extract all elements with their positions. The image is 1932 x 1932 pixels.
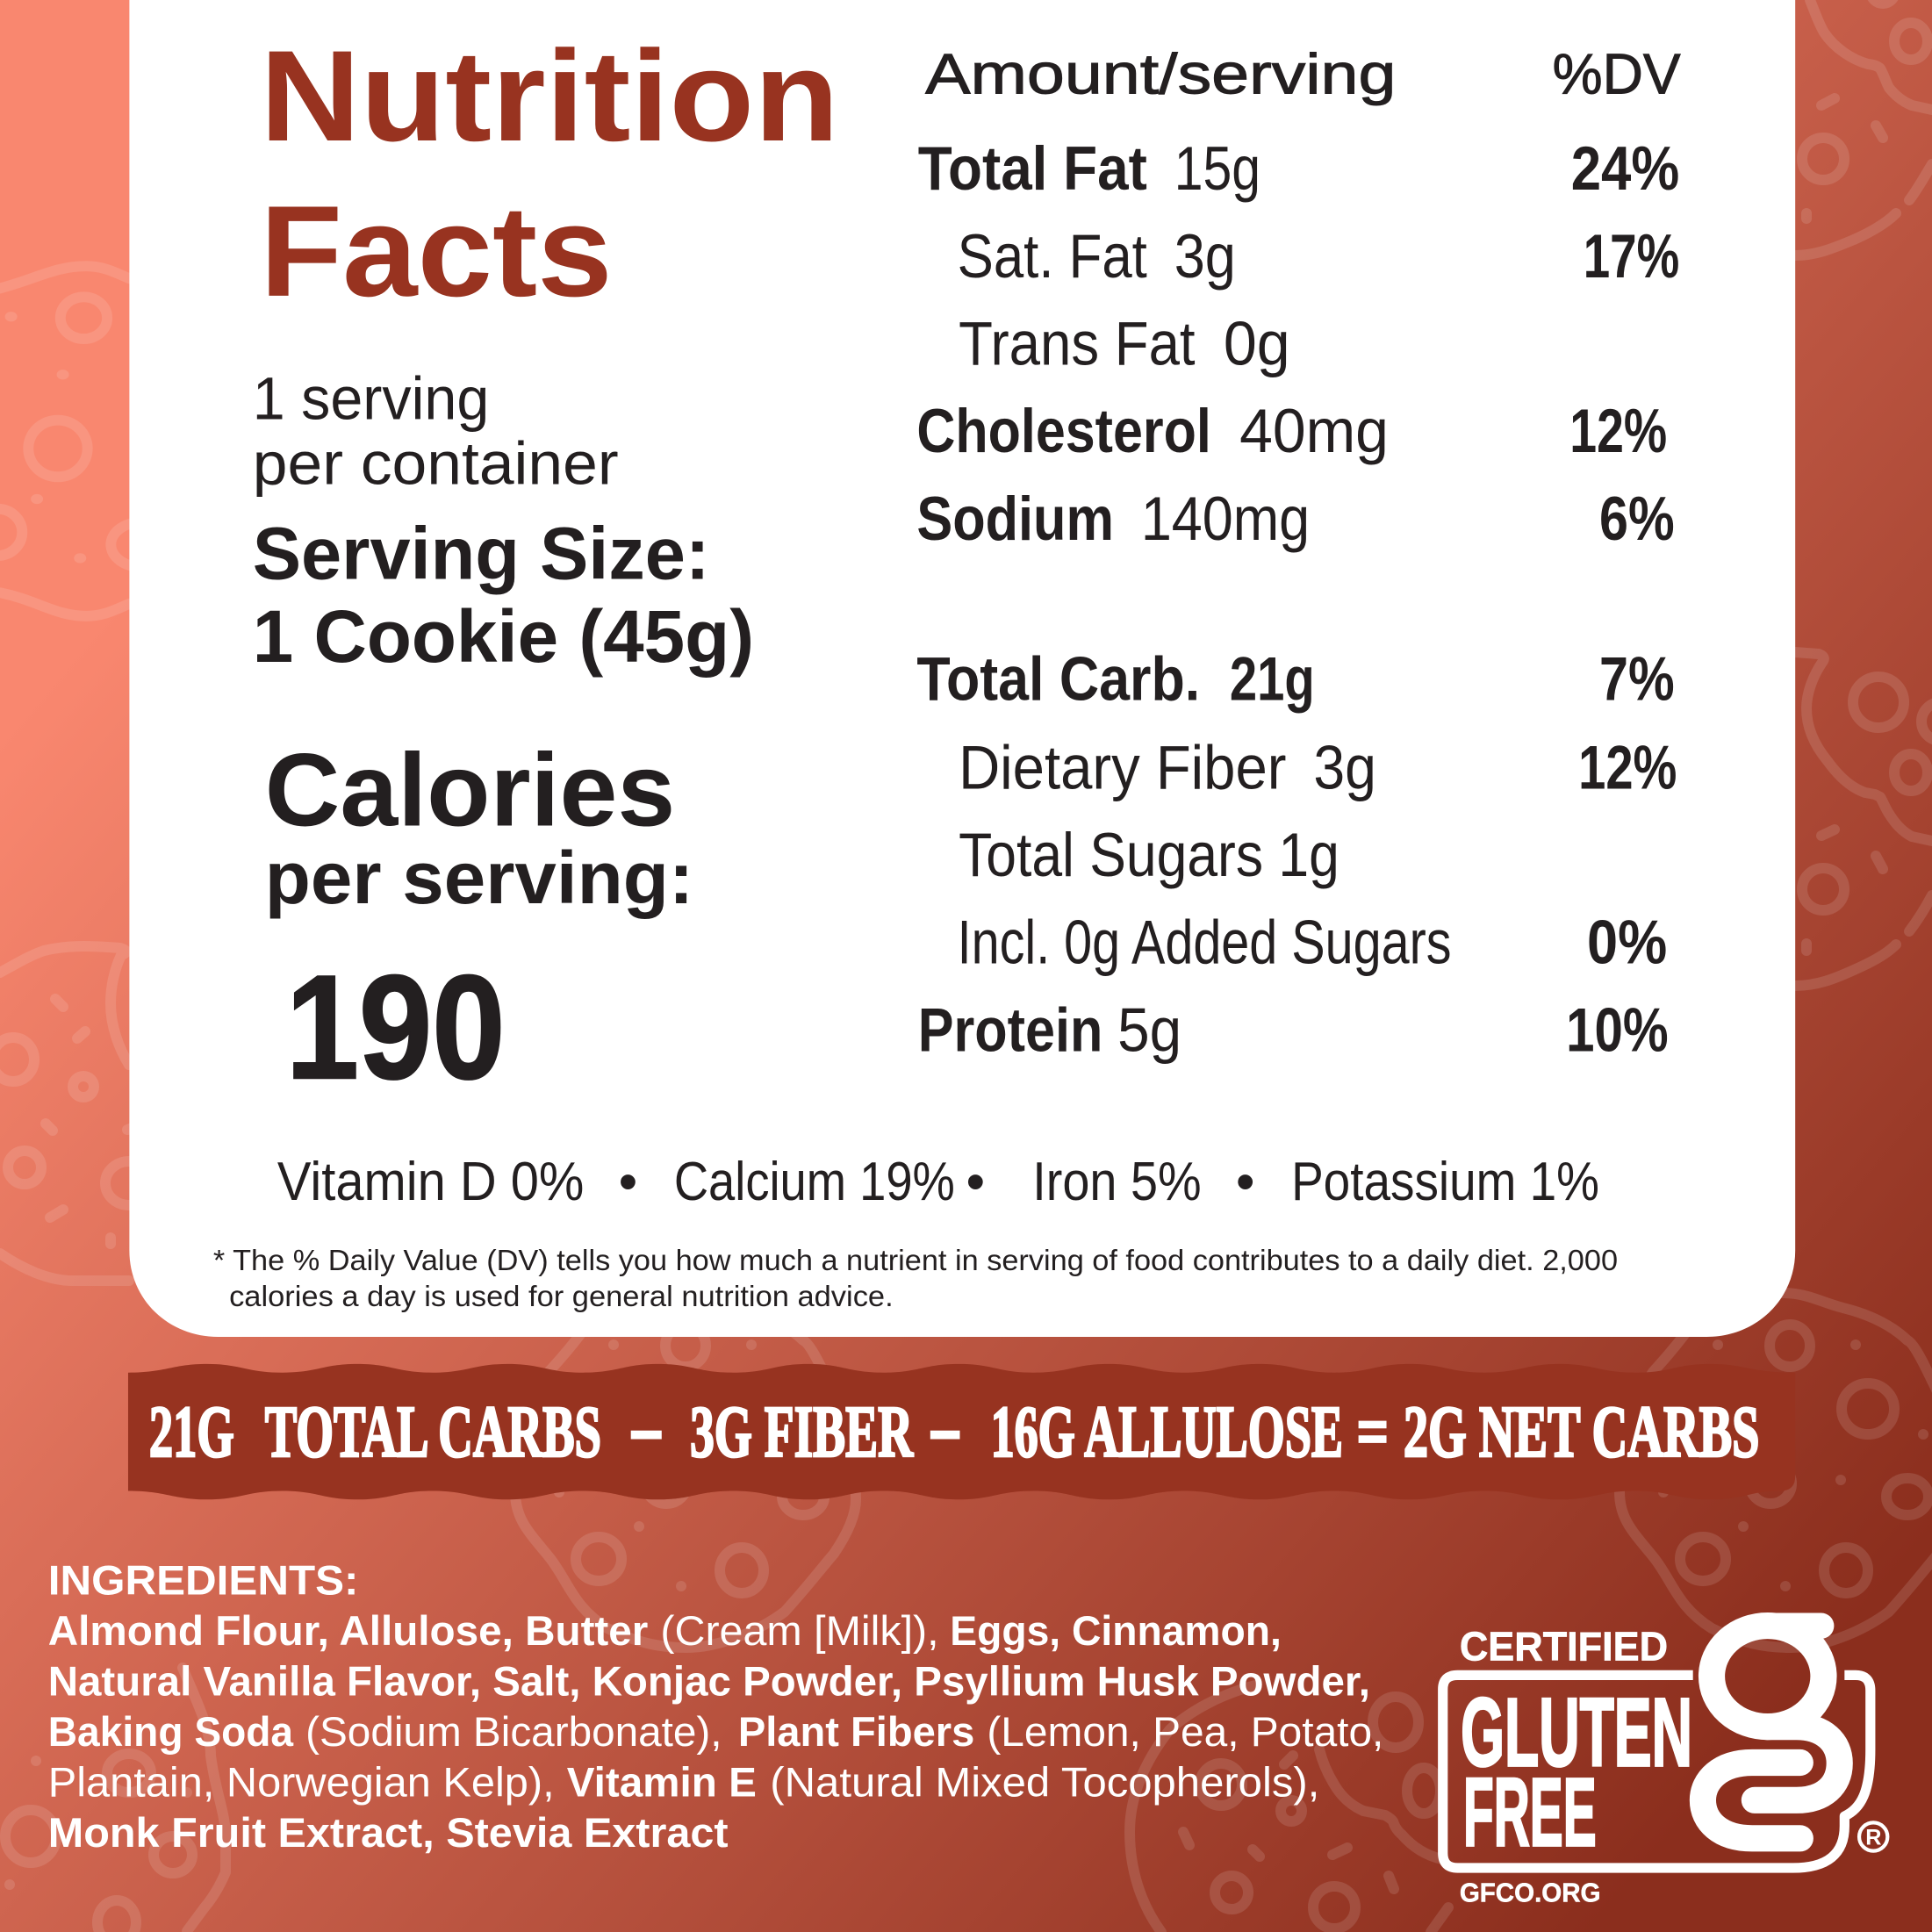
right cookie middle — [1795, 652, 1932, 986]
banner: net carbs equation: TOTAL CARBS — [265, 1391, 601, 1473]
row: dietary fiber — [959, 732, 1677, 801]
text: calories per serving: Calories — [265, 731, 675, 847]
logo: certified gluten free: GFCO.ORG — [1460, 1878, 1601, 1908]
text: servings per container: per container — [253, 430, 619, 498]
title: Nutrition Facts — [260, 25, 839, 324]
ingredients list: (Lemon, Pea, Potato, — [987, 1709, 1383, 1756]
right cookie top — [1795, 0, 1932, 255]
vitamins and minerals row: • — [966, 1152, 985, 1212]
ingredients list: (Natural Mixed Tocopherols), — [770, 1760, 1319, 1806]
number: 190 calories: 190 — [286, 944, 506, 1110]
row: saturated fat: Sat. Fat — [958, 221, 1147, 291]
vitamins and minerals row: Calcium 19% — [674, 1152, 955, 1212]
row: trans fat: Trans Fat — [959, 308, 1196, 377]
title: Nutrition Facts: Facts — [260, 180, 613, 324]
row: added sugars: Incl. 0g Added Sugars — [958, 908, 1452, 977]
ingredients list: Baking Soda — [48, 1709, 294, 1756]
footnote — [213, 1245, 1618, 1313]
vitamins and minerals row: • — [619, 1152, 637, 1212]
third bottom cookie — [1130, 1685, 1448, 1932]
ingredients list: INGREDIENTS: — [48, 1557, 358, 1604]
row: added sugars: 0% — [1587, 908, 1667, 977]
vitamins and minerals row: Potassium 1% — [1291, 1152, 1599, 1212]
vitamins and minerals row — [277, 1152, 1599, 1212]
row: saturated fat — [958, 221, 1679, 291]
row: total fat: 15g — [1174, 133, 1260, 203]
row: protein — [918, 995, 1669, 1064]
vitamins and minerals row: • — [1236, 1152, 1255, 1212]
logo: certified gluten free: FREE — [1463, 1759, 1597, 1867]
text: servings per container — [253, 364, 619, 498]
row: cholesterol: 12% — [1569, 396, 1667, 465]
text: serving size — [253, 513, 754, 678]
vitamins and minerals row: Vitamin D 0% — [277, 1152, 584, 1212]
row: sodium: 6% — [1599, 484, 1675, 553]
text: calories per serving: per serving: — [265, 837, 693, 919]
banner: net carbs equation: 3G FIBER — [690, 1391, 914, 1473]
banner: net carbs equation: 16G ALLULOSE — [991, 1391, 1343, 1473]
row: cholesterol: 40mg — [1239, 396, 1389, 465]
footnote: * The % Daily Value (DV) tells you how much a nutrient in serving of food contributes to a daily diet. 2,000 — [213, 1245, 1618, 1277]
logo: certified gluten free — [1443, 1623, 1887, 1908]
text: servings per container: 1 serving — [253, 364, 489, 432]
left cookie — [0, 946, 129, 1281]
title: Nutrition Facts: Nutrition — [260, 25, 839, 169]
table header: Amount/serving — [925, 43, 1396, 106]
table header: %DV — [1553, 43, 1681, 106]
row: cholesterol: Cholesterol — [916, 396, 1211, 465]
logo: certified gluten free: GLUTEN — [1461, 1679, 1692, 1787]
footnote: calories a day is used for general nutrition advice. — [229, 1281, 894, 1313]
row: dietary fiber: 3g — [1313, 732, 1376, 801]
banner: net carbs equation: 21G — [149, 1391, 234, 1473]
row: total carbohydrate: 21g — [1230, 643, 1315, 713]
vitamins and minerals row: Iron 5% — [1032, 1152, 1202, 1212]
row: total fat — [918, 133, 1679, 203]
ingredients list: (Cream [Milk]), — [660, 1608, 939, 1655]
ingredients list: Monk Fruit Extract, Stevia Extract — [48, 1810, 729, 1857]
text: serving size: 1 Cookie (45g) — [253, 595, 754, 678]
banner: net carbs equation: 2G NET CARBS — [1404, 1391, 1759, 1473]
text: calories per serving — [265, 731, 693, 919]
row: trans fat: 0g — [1224, 308, 1290, 377]
banner: net carbs equation — [128, 1364, 1795, 1499]
table header — [925, 43, 1681, 106]
row: protein: 5g — [1117, 995, 1181, 1064]
row: saturated fat: 17% — [1584, 221, 1679, 291]
ingredients list: Almond Flour, Allulose, Butter — [48, 1608, 648, 1655]
text: serving size: Serving Size: — [253, 513, 710, 595]
row: total sugars: Total Sugars 1g — [959, 820, 1339, 889]
ingredients list: (Sodium Bicarbonate), — [305, 1709, 722, 1756]
row: dietary fiber: Dietary Fiber — [959, 732, 1286, 801]
row: protein: Protein — [918, 995, 1102, 1064]
bottom left cookie — [183, 1668, 226, 1931]
row: total carbohydrate — [916, 643, 1675, 713]
panel: nutrition facts card — [129, 0, 1795, 1337]
row: sodium — [916, 484, 1675, 553]
row: cholesterol — [916, 396, 1667, 465]
logo: certified gluten free: CERTIFIED — [1460, 1623, 1668, 1669]
ingredients list: Natural Vanilla Flavor, Salt, Konjac Powder, Psyllium Husk Powder, — [48, 1658, 1370, 1705]
row: saturated fat: 3g — [1174, 221, 1236, 291]
row: total carbohydrate: 7% — [1599, 643, 1675, 713]
row: dietary fiber: 12% — [1578, 732, 1677, 801]
row: total fat: 24% — [1571, 133, 1679, 203]
row: total carbohydrate: Total Carb. — [916, 643, 1200, 713]
row: protein: 10% — [1566, 995, 1669, 1064]
row: sodium: 140mg — [1141, 484, 1310, 553]
repeating bottom cookies — [1620, 1293, 1932, 1648]
ingredients list — [48, 1557, 1383, 1857]
row: sodium: Sodium — [916, 484, 1114, 553]
banner: net carbs equation: = — [1356, 1391, 1389, 1473]
logo: certified gluten free: R — [1865, 1825, 1881, 1849]
row: total fat: Total Fat — [918, 133, 1147, 203]
ingredients list: Plant Fibers — [738, 1709, 974, 1756]
ingredients list: Eggs, Cinnamon, — [950, 1608, 1282, 1655]
ingredients list: Vitamin E — [567, 1760, 757, 1806]
ingredients list: Plantain, Norwegian Kelp), — [48, 1760, 555, 1806]
